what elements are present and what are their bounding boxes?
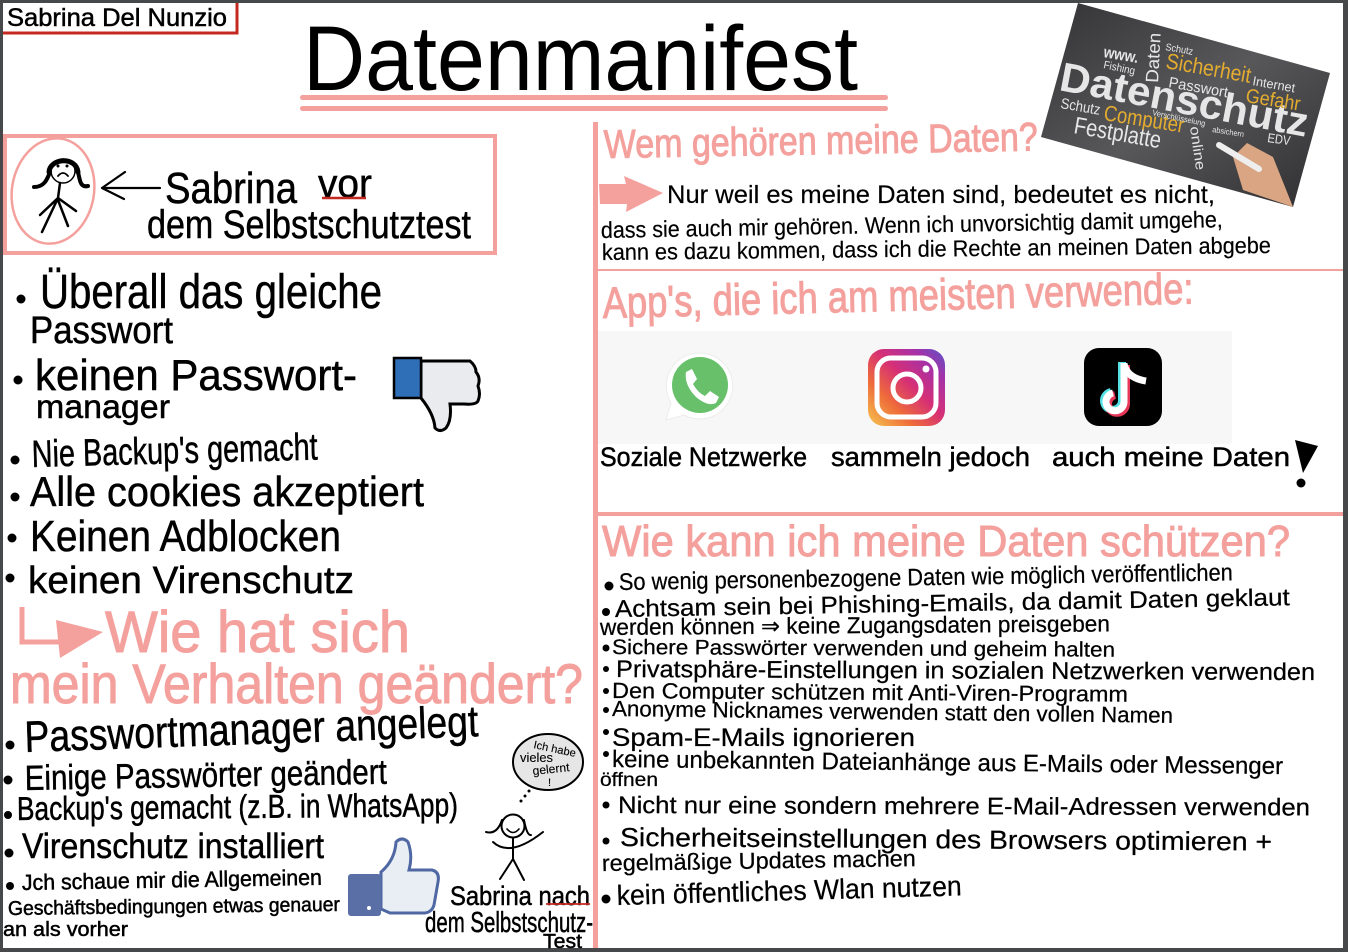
list: protection measures: Anonyme Nicknames verwenden statt den vollen Namen <box>612 696 1173 728</box>
icon: happy stick figure <box>486 814 543 880</box>
text: Sabrina vor: vor <box>318 162 372 206</box>
list: behaviour after: Jch schaue mir die Allgemeinen <box>22 865 322 895</box>
list: behaviour before: keinen Passwort- <box>35 351 357 400</box>
speech bubble: Ich habe vieles gelernt: gelernt <box>532 760 571 778</box>
list: behaviour after: Backup's gemacht (z.B. in WhatsApp) <box>17 786 458 827</box>
paragraph: dass sie auch mir gehören. Wenn ich unvorsichtig damit umgehe, <box>601 206 1223 243</box>
icon: Instagram <box>868 349 945 426</box>
list: behaviour after <box>3 697 479 941</box>
image: Datenschutz chalkboard: Sicherheit <box>1164 48 1253 88</box>
list: behaviour after: an als vorher <box>3 919 128 941</box>
list: protection measures: Sichere Passwörter verwenden und geheim halten <box>612 636 1115 662</box>
heading: Wie kann ich meine Daten schützen? <box>602 517 1290 566</box>
image: Datenschutz chalkboard: online <box>1187 125 1209 171</box>
text: dem Selbstschutztest: dem Selbstschutztest <box>147 203 471 247</box>
icon: thumbs down <box>394 358 480 430</box>
image: Datenschutz chalkboard: Schutz <box>1164 42 1194 58</box>
image: Datenschutz chalkboard: Datenschutz <box>1056 54 1312 146</box>
image: Datenschutz chalkboard: Internet <box>1251 73 1297 95</box>
list: behaviour after: Passwortmanager angelegt <box>24 697 479 762</box>
list: protection measures: Achtsam sein bei Phishing-Emails, da damit Daten geklaut <box>615 584 1290 623</box>
title: Datenmanifest <box>303 8 858 110</box>
paragraph: Nur weil es meine Daten sind, bedeutet es nicht, <box>667 181 1215 209</box>
section: how to protect data <box>599 517 1315 911</box>
speech bubble: Ich habe vieles gelernt: Ich habe <box>532 739 577 760</box>
list: protection measures: keine unbekannten Dateianhänge aus E-Mails oder Messenger <box>612 746 1283 780</box>
list: protection measures: kein öffentliches Wlan nutzen <box>616 870 962 911</box>
text: Sabrina nach dem Selbstschutz-Test <box>425 881 593 952</box>
list: protection measures: Spam-E-Mails ignorieren <box>612 724 915 752</box>
paragraph <box>601 181 1271 265</box>
heading: behaviour change: Wie hat sich <box>105 600 410 665</box>
image: Datenschutz chalkboard: Schutz <box>1059 95 1102 119</box>
image: Datenschutz chalkboard: Passwort <box>1167 74 1230 101</box>
speech bubble: Ich habe vieles gelernt <box>513 734 583 802</box>
text: social networks: Soziale Netzwerke <box>600 442 807 472</box>
list: behaviour before: Keinen Adblocken <box>30 512 341 561</box>
image: Datenschutz chalkboard <box>1041 3 1330 207</box>
heading: behaviour change: mein Verhalten geändert? <box>10 652 583 715</box>
image: Datenschutz chalkboard: Festplatte <box>1072 112 1163 154</box>
list: behaviour before: Passwort <box>30 310 173 352</box>
icon: sad stick figure in oval <box>3 132 103 250</box>
image: Datenschutz chalkboard: Fishing <box>1102 59 1136 78</box>
list: protection measures <box>599 559 1315 911</box>
list: protection measures: Den Computer schützen mit Anti-Viren-Programm <box>612 678 1128 707</box>
image: Datenschutz chalkboard: www. <box>1101 44 1140 67</box>
image: Datenschutz chalkboard: EDV <box>1267 130 1292 148</box>
list: behaviour after: Geschäftsbedingungen etwas genauer <box>8 894 340 920</box>
heading: Wem gehören meine Daten? <box>603 115 1038 167</box>
author label box: Sabrina Del Nunzio <box>7 4 227 32</box>
divider: vertical <box>593 122 598 948</box>
arrow: points to figure <box>102 172 160 199</box>
list: behaviour after: Virenschutz installiert <box>22 827 324 866</box>
text: social networks: auch meine Daten <box>1052 442 1290 472</box>
text: social networks <box>600 440 1318 488</box>
list: protection measures: Privatsphäre-Einstellungen in sozialen Netzwerken verwenden <box>616 656 1315 686</box>
section: Wem gehören meine Daten <box>599 115 1271 265</box>
image: Datenschutz chalkboard: Daten <box>1142 32 1165 83</box>
list: behaviour before: manager <box>36 388 170 425</box>
text: Sabrina nach dem Selbstschutz-Test: Sabrina nach <box>450 881 590 911</box>
image: Datenschutz chalkboard: Verschlüsselung <box>1152 108 1206 128</box>
paragraph: kann es dazu kommen, dass ich die Rechte an meinen Daten abgebe <box>602 232 1271 265</box>
speech bubble: Ich habe vieles gelernt: ! <box>548 777 551 789</box>
list: protection measures: öffnen <box>600 770 658 791</box>
list: protection measures: regelmäßige Updates machen <box>602 845 916 876</box>
text: Sabrina nach dem Selbstschutz-Test: dem Selbstschutz- <box>425 907 593 939</box>
heading: behaviour change <box>10 600 583 715</box>
list: protection measures: werden können ⇒ keine Zugangsdaten preisgeben <box>599 610 1110 640</box>
list: behaviour before: Alle cookies akzeptiert <box>30 468 424 515</box>
text: Sabrina vor: Sabrina <box>165 164 297 213</box>
image: Datenschutz chalkboard: Gefahr <box>1244 85 1302 116</box>
speech bubble: Ich habe vieles gelernt: vieles <box>520 750 553 765</box>
heading: App's, die ich am meisten verwende: <box>602 265 1194 328</box>
text: social networks: sammeln jedoch <box>831 442 1030 472</box>
list: protection measures: So wenig personenbezogene Daten wie möglich veröffentlichen <box>619 559 1233 596</box>
list: protection measures: Sicherheitseinstellungen des Browsers optimieren + <box>620 822 1272 857</box>
panel: before the test <box>3 132 495 253</box>
image: Datenschutz chalkboard: Computer <box>1102 100 1186 138</box>
arrow: pink <box>599 176 663 212</box>
icon: thumbs up <box>348 839 438 916</box>
list: behaviour after: Einige Passwörter geändert <box>24 753 387 798</box>
image: Datenschutz chalkboard: absichern <box>1212 125 1245 139</box>
icon: WhatsApp <box>666 353 733 420</box>
section: most used apps <box>598 265 1318 488</box>
list: behaviour before: Überall das gleiche <box>40 266 382 319</box>
list: behaviour before: keinen Virenschutz <box>28 560 354 602</box>
list: protection measures: Nicht nur eine sondern mehrere E-Mail-Adressen verwenden <box>618 792 1310 821</box>
icon: TikTok <box>1084 348 1162 426</box>
list: behaviour before <box>6 266 424 602</box>
list: behaviour before: Nie Backup's gemacht <box>31 427 318 476</box>
